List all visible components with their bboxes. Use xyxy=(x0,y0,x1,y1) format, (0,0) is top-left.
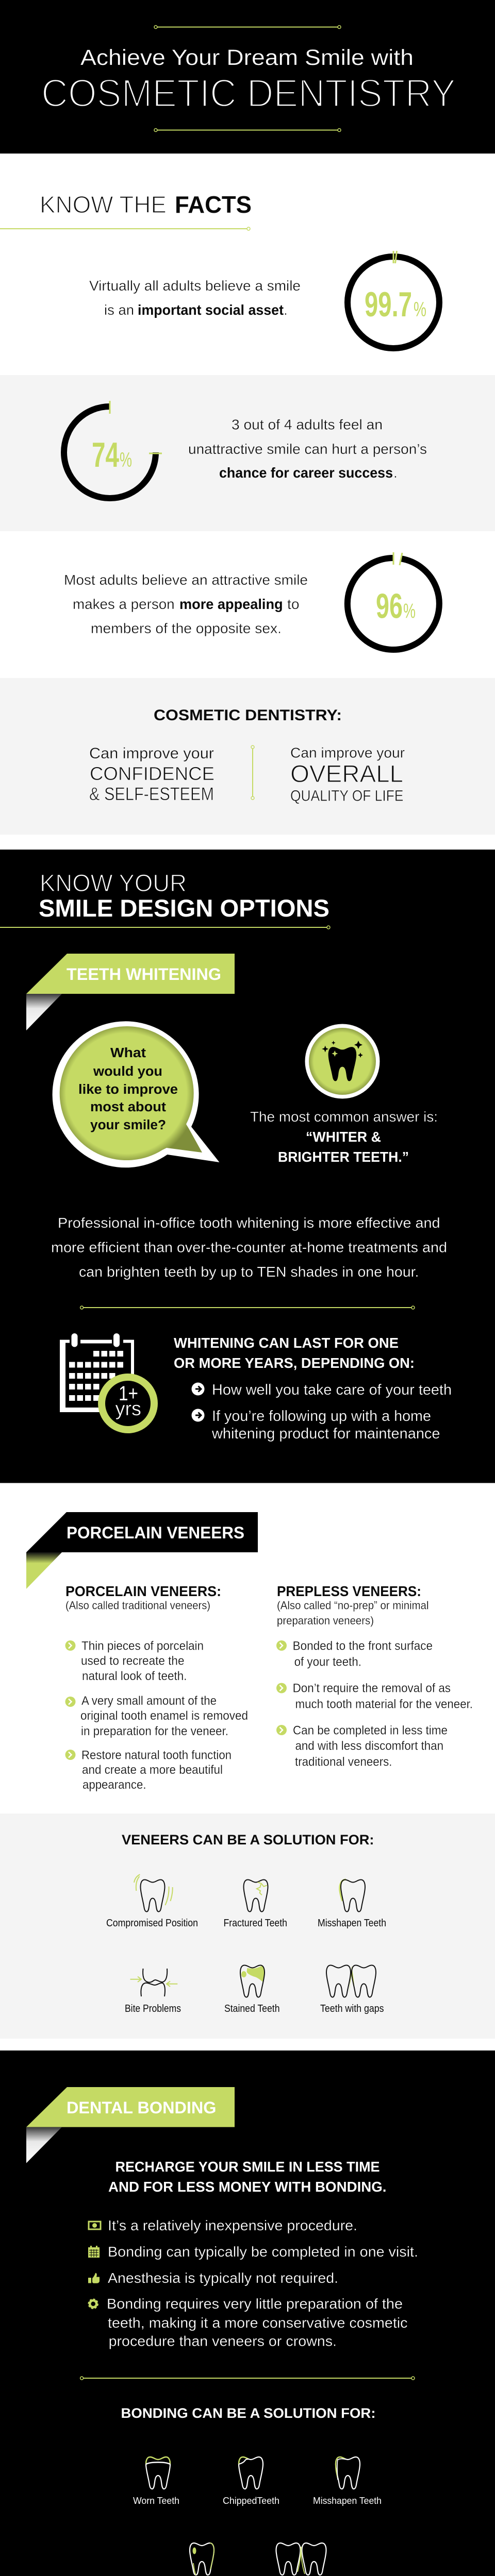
ribbon: teeth whitening xyxy=(26,954,235,1030)
fact text: more appealing xyxy=(179,596,283,612)
panel: page header xyxy=(0,0,495,154)
ribbon: porcelain veneers: PORCELAIN VENEERS xyxy=(67,1523,244,1542)
icon: compromised position: Compromised Position xyxy=(106,1918,198,1929)
icon: compromised position xyxy=(106,1874,198,1929)
fact text: important social asset xyxy=(138,302,284,318)
heading: know the facts: KNOW THE xyxy=(40,191,167,218)
icon: calendar with 1+ yrs badge: yrs xyxy=(116,1398,141,1420)
column: porcelain veneers: and create a more beautiful xyxy=(82,1763,223,1777)
panel heading: COSMETIC DENTISTRY: xyxy=(154,707,342,724)
fact text: is an xyxy=(104,302,134,318)
icon: misshapen teeth: Misshapen Teeth xyxy=(318,1918,386,1929)
column: prepless veneers: traditional veneers. xyxy=(295,1755,392,1769)
icon: fractured teeth xyxy=(224,1879,287,1929)
most common answer xyxy=(250,1109,438,1165)
icon: teeth with gaps: Teeth with gaps xyxy=(320,2003,384,2014)
fact text: to xyxy=(287,596,299,612)
top divider xyxy=(154,26,341,29)
fact text: 3 out of 4 adults feel an xyxy=(232,416,383,433)
fact text: chance for career success xyxy=(219,465,393,481)
ring chart 74 xyxy=(64,401,162,498)
icon: misshapen teeth xyxy=(313,2457,382,2506)
column: porcelain veneers: original tooth enamel is removed xyxy=(80,1709,248,1723)
column: prepless veneers: preparation veneers) xyxy=(277,1614,374,1627)
fact text: Virtually all adults believe a smile xyxy=(89,278,301,294)
icon: chipped teeth: ChippedTeeth xyxy=(223,2496,279,2506)
panel: smile design options xyxy=(0,850,495,1483)
ring chart 99.7 xyxy=(348,251,439,348)
fact text xyxy=(89,278,301,318)
speech bubble: like to improve xyxy=(78,1082,178,1097)
column: porcelain veneers: Restore natural tooth function xyxy=(81,1749,232,1762)
benefit: quality of life xyxy=(290,745,405,805)
ribbon: dental bonding: DENTAL BONDING xyxy=(67,2098,217,2117)
column: prepless veneers: (Also called “no-prep” or minimal xyxy=(277,1599,429,1612)
ring chart 96: % xyxy=(403,600,416,622)
column: prepless veneers: of your teeth. xyxy=(294,1655,361,1669)
fact text: makes a person xyxy=(73,596,175,612)
section heading xyxy=(0,869,330,929)
column: porcelain veneers: A very small amount of the xyxy=(81,1694,217,1708)
icon: fractured teeth: Fractured Teeth xyxy=(224,1918,287,1929)
divider xyxy=(80,1306,415,1309)
heading: know the facts xyxy=(0,191,252,230)
column: porcelain veneers: used to recreate the xyxy=(81,1654,185,1668)
bonding benefit: no anesthesia: Anesthesia is typically not required. xyxy=(108,2270,338,2286)
whitening paragraph: more efficient than over-the-counter at-home treatments and xyxy=(51,1240,447,1255)
column: porcelain veneers: PORCELAIN VENEERS: xyxy=(65,1583,221,1599)
fact text: Most adults believe an attractive smile xyxy=(64,572,308,588)
bottom divider xyxy=(154,129,341,132)
fact text xyxy=(188,416,427,481)
bonding headline: RECHARGE YOUR SMILE IN LESS TIME xyxy=(116,2159,380,2175)
icon: sparkling tooth xyxy=(305,1024,380,1098)
speech bubble xyxy=(53,1021,220,1167)
benefit: quality of life: QUALITY OF LIFE xyxy=(290,787,403,805)
bonding benefit: one visit: Bonding can typically be completed in one visit. xyxy=(108,2244,418,2260)
speech bubble: most about xyxy=(90,1100,167,1114)
ring chart 74: % xyxy=(120,449,132,471)
bonding benefit: little preparation: procedure than veneers or crowns. xyxy=(109,2333,337,2349)
column: prepless veneers: Can be completed in less time xyxy=(293,1724,448,1737)
column: porcelain veneers: in preparation for the veneer. xyxy=(81,1724,228,1738)
icon: stained teeth: Stained Teeth xyxy=(224,2003,279,2014)
whitening duration heading: WHITENING CAN LAST FOR ONE xyxy=(174,1335,399,1351)
whitening duration heading xyxy=(174,1335,415,1371)
benefit: confidence: CONFIDENCE xyxy=(90,763,214,784)
heading: know the facts: FACTS xyxy=(175,191,252,218)
bonding benefit: little preparation: Bonding requires very little preparation of the xyxy=(107,2296,403,2312)
icon: decayed teeth xyxy=(172,2543,233,2576)
ring chart 96 xyxy=(348,552,439,650)
bonding headline: AND FOR LESS MONEY WITH BONDING. xyxy=(108,2179,387,2195)
icon: bite problems xyxy=(125,1969,181,2014)
most common answer: “WHITER & xyxy=(306,1129,381,1145)
whitening duration list xyxy=(192,1382,452,1442)
fact text: . xyxy=(393,465,398,481)
panel: porcelain veneers xyxy=(26,1512,473,1792)
ribbon: dental bonding xyxy=(26,2087,235,2163)
icon: chipped teeth xyxy=(223,2457,279,2506)
icon: misshapen teeth: Misshapen Teeth xyxy=(313,2496,382,2506)
benefit: confidence xyxy=(89,745,214,804)
bonding benefit: little preparation xyxy=(89,2296,407,2349)
ring chart 74: 74 xyxy=(92,435,119,474)
bonding solutions heading: BONDING CAN BE A SOLUTION FOR: xyxy=(121,2405,375,2421)
benefit: quality of life: OVERALL xyxy=(290,760,403,787)
fact text: . xyxy=(284,302,288,318)
panel: cosmetic dentistry benefits xyxy=(0,678,495,835)
vertical divider xyxy=(251,745,254,800)
panel: fact 99.7 percent xyxy=(89,251,439,348)
column: prepless veneers: much tooth material for the veneer. xyxy=(295,1698,473,1711)
divider xyxy=(80,2377,415,2380)
column: prepless veneers: and with less discomfort than xyxy=(295,1739,443,1753)
benefit: quality of life: Can improve your xyxy=(290,745,405,760)
whitening duration heading: OR MORE YEARS, DEPENDING ON: xyxy=(174,1355,415,1371)
icon: worn teeth xyxy=(133,2457,179,2506)
section heading: SMILE DESIGN OPTIONS xyxy=(39,894,329,922)
title line one: Achieve Your Dream Smile with xyxy=(80,45,414,70)
panel: fact 96 percent xyxy=(64,552,439,650)
whitening paragraph: can brighten teeth by up to TEN shades in one hour. xyxy=(79,1264,419,1280)
whitening paragraph xyxy=(51,1215,447,1280)
fact text: unattractive smile can hurt a person’s xyxy=(188,441,427,457)
column: prepless veneers: Bonded to the front surface xyxy=(293,1639,433,1653)
icon: worn teeth: Worn Teeth xyxy=(133,2496,179,2506)
speech bubble: your smile? xyxy=(90,1118,166,1132)
column: porcelain veneers xyxy=(65,1583,248,1792)
bonding benefit: inexpensive: It’s a relatively inexpensive procedure. xyxy=(108,2217,357,2233)
icon: teeth with gaps xyxy=(320,1965,384,2014)
whitening duration list: whitening product for maintenance xyxy=(211,1426,440,1442)
column: prepless veneers xyxy=(276,1583,473,1769)
icon: teeth with gaps xyxy=(270,2543,334,2576)
ring chart 96: 96 xyxy=(376,586,403,625)
column: prepless veneers: PREPLESS VENEERS: xyxy=(277,1583,421,1599)
benefit: confidence: & SELF-ESTEEM xyxy=(89,784,214,804)
whitening duration list: How well you take care of your teeth xyxy=(212,1382,452,1398)
most common answer: The most common answer is: xyxy=(250,1109,438,1125)
panel heading: VENEERS CAN BE A SOLUTION FOR: xyxy=(122,1832,374,1848)
speech bubble: would you xyxy=(93,1064,162,1079)
icon: calendar with 1+ yrs badge: 1+ xyxy=(119,1382,138,1405)
panel: fact 74 percent xyxy=(0,375,495,531)
column: porcelain veneers: appearance. xyxy=(82,1778,146,1792)
panel: veneers solutions xyxy=(0,1814,495,2039)
benefit: confidence: Can improve your xyxy=(89,745,214,762)
title line two: COSMETIC DENTISTRY xyxy=(41,72,456,115)
column: porcelain veneers: natural look of teeth. xyxy=(82,1669,187,1683)
panel: dental bonding xyxy=(0,2050,495,2576)
whitening duration list: If you’re following up with a home xyxy=(212,1408,431,1425)
ribbon: teeth whitening: TEETH WHITENING xyxy=(67,965,221,984)
fact text: members of the opposite sex. xyxy=(91,620,282,636)
fact text xyxy=(64,572,308,636)
icon: stained teeth xyxy=(224,1965,279,2014)
icon: bite problems: Bite Problems xyxy=(125,2003,181,2014)
whitening paragraph: Professional in-office tooth whitening is more effective and xyxy=(58,1215,440,1231)
ribbon: porcelain veneers xyxy=(26,1512,258,1589)
section heading: KNOW YOUR xyxy=(40,869,187,896)
column: porcelain veneers: Thin pieces of porcelain xyxy=(81,1639,204,1653)
bonding headline xyxy=(108,2159,387,2195)
most common answer: BRIGHTER TEETH.” xyxy=(278,1149,409,1165)
icon: misshapen teeth xyxy=(318,1879,386,1929)
bonding benefit: little preparation: teeth, making it a more conservative cosmetic xyxy=(108,2315,407,2331)
ring chart 99.7: % xyxy=(414,298,426,321)
ring chart 99.7: 99.7 xyxy=(365,285,412,324)
icon: calendar with 1+ yrs badge xyxy=(60,1333,154,1430)
column: prepless veneers: Don’t require the removal of as xyxy=(293,1682,451,1696)
column: porcelain veneers: (Also called traditional veneers) xyxy=(65,1599,210,1612)
speech bubble: What xyxy=(110,1046,146,1060)
